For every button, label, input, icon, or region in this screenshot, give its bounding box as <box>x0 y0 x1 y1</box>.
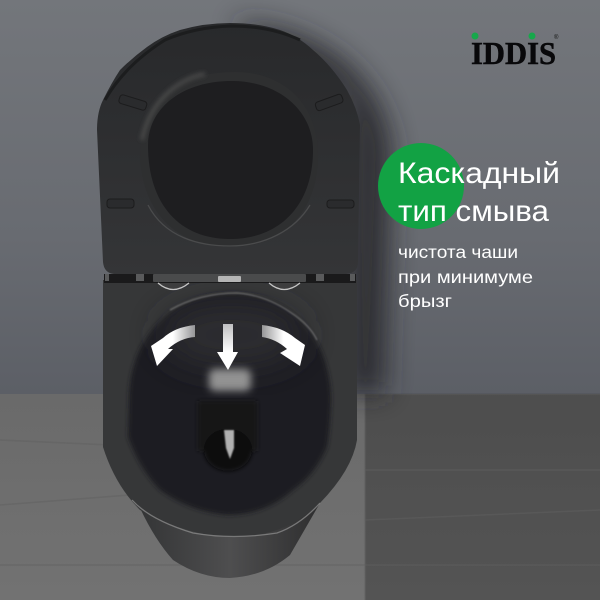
bowl glow <box>209 369 251 391</box>
heading <box>398 157 560 228</box>
heading: Каскадный <box>398 157 560 190</box>
toilet lower body <box>140 503 320 578</box>
flush arrow centre <box>217 324 238 370</box>
hinge cups <box>158 283 189 290</box>
bowl interior <box>128 293 331 515</box>
description text: брызг <box>398 291 452 311</box>
water highlight <box>224 430 234 459</box>
heading: тип смыва <box>398 195 549 228</box>
toilet bowl <box>103 280 357 537</box>
chrome button <box>218 276 241 282</box>
toilet shadow <box>230 22 392 394</box>
brand logo: ® <box>554 34 559 41</box>
description text <box>398 242 533 311</box>
green accent circle <box>378 143 464 229</box>
drain <box>198 401 257 471</box>
floor <box>0 394 600 600</box>
hinge bar <box>104 274 356 290</box>
lid bumpers <box>107 93 354 208</box>
description text: чистота чаши <box>398 242 518 262</box>
description text: при минимуме <box>398 267 533 287</box>
flush arrow right <box>262 325 305 366</box>
wall background <box>0 0 600 394</box>
lid inner ring <box>140 72 318 247</box>
lid centre <box>148 81 313 239</box>
brand logo: IDDIS <box>471 35 556 71</box>
flush arrow left <box>151 325 195 366</box>
toilet lid <box>97 23 360 274</box>
